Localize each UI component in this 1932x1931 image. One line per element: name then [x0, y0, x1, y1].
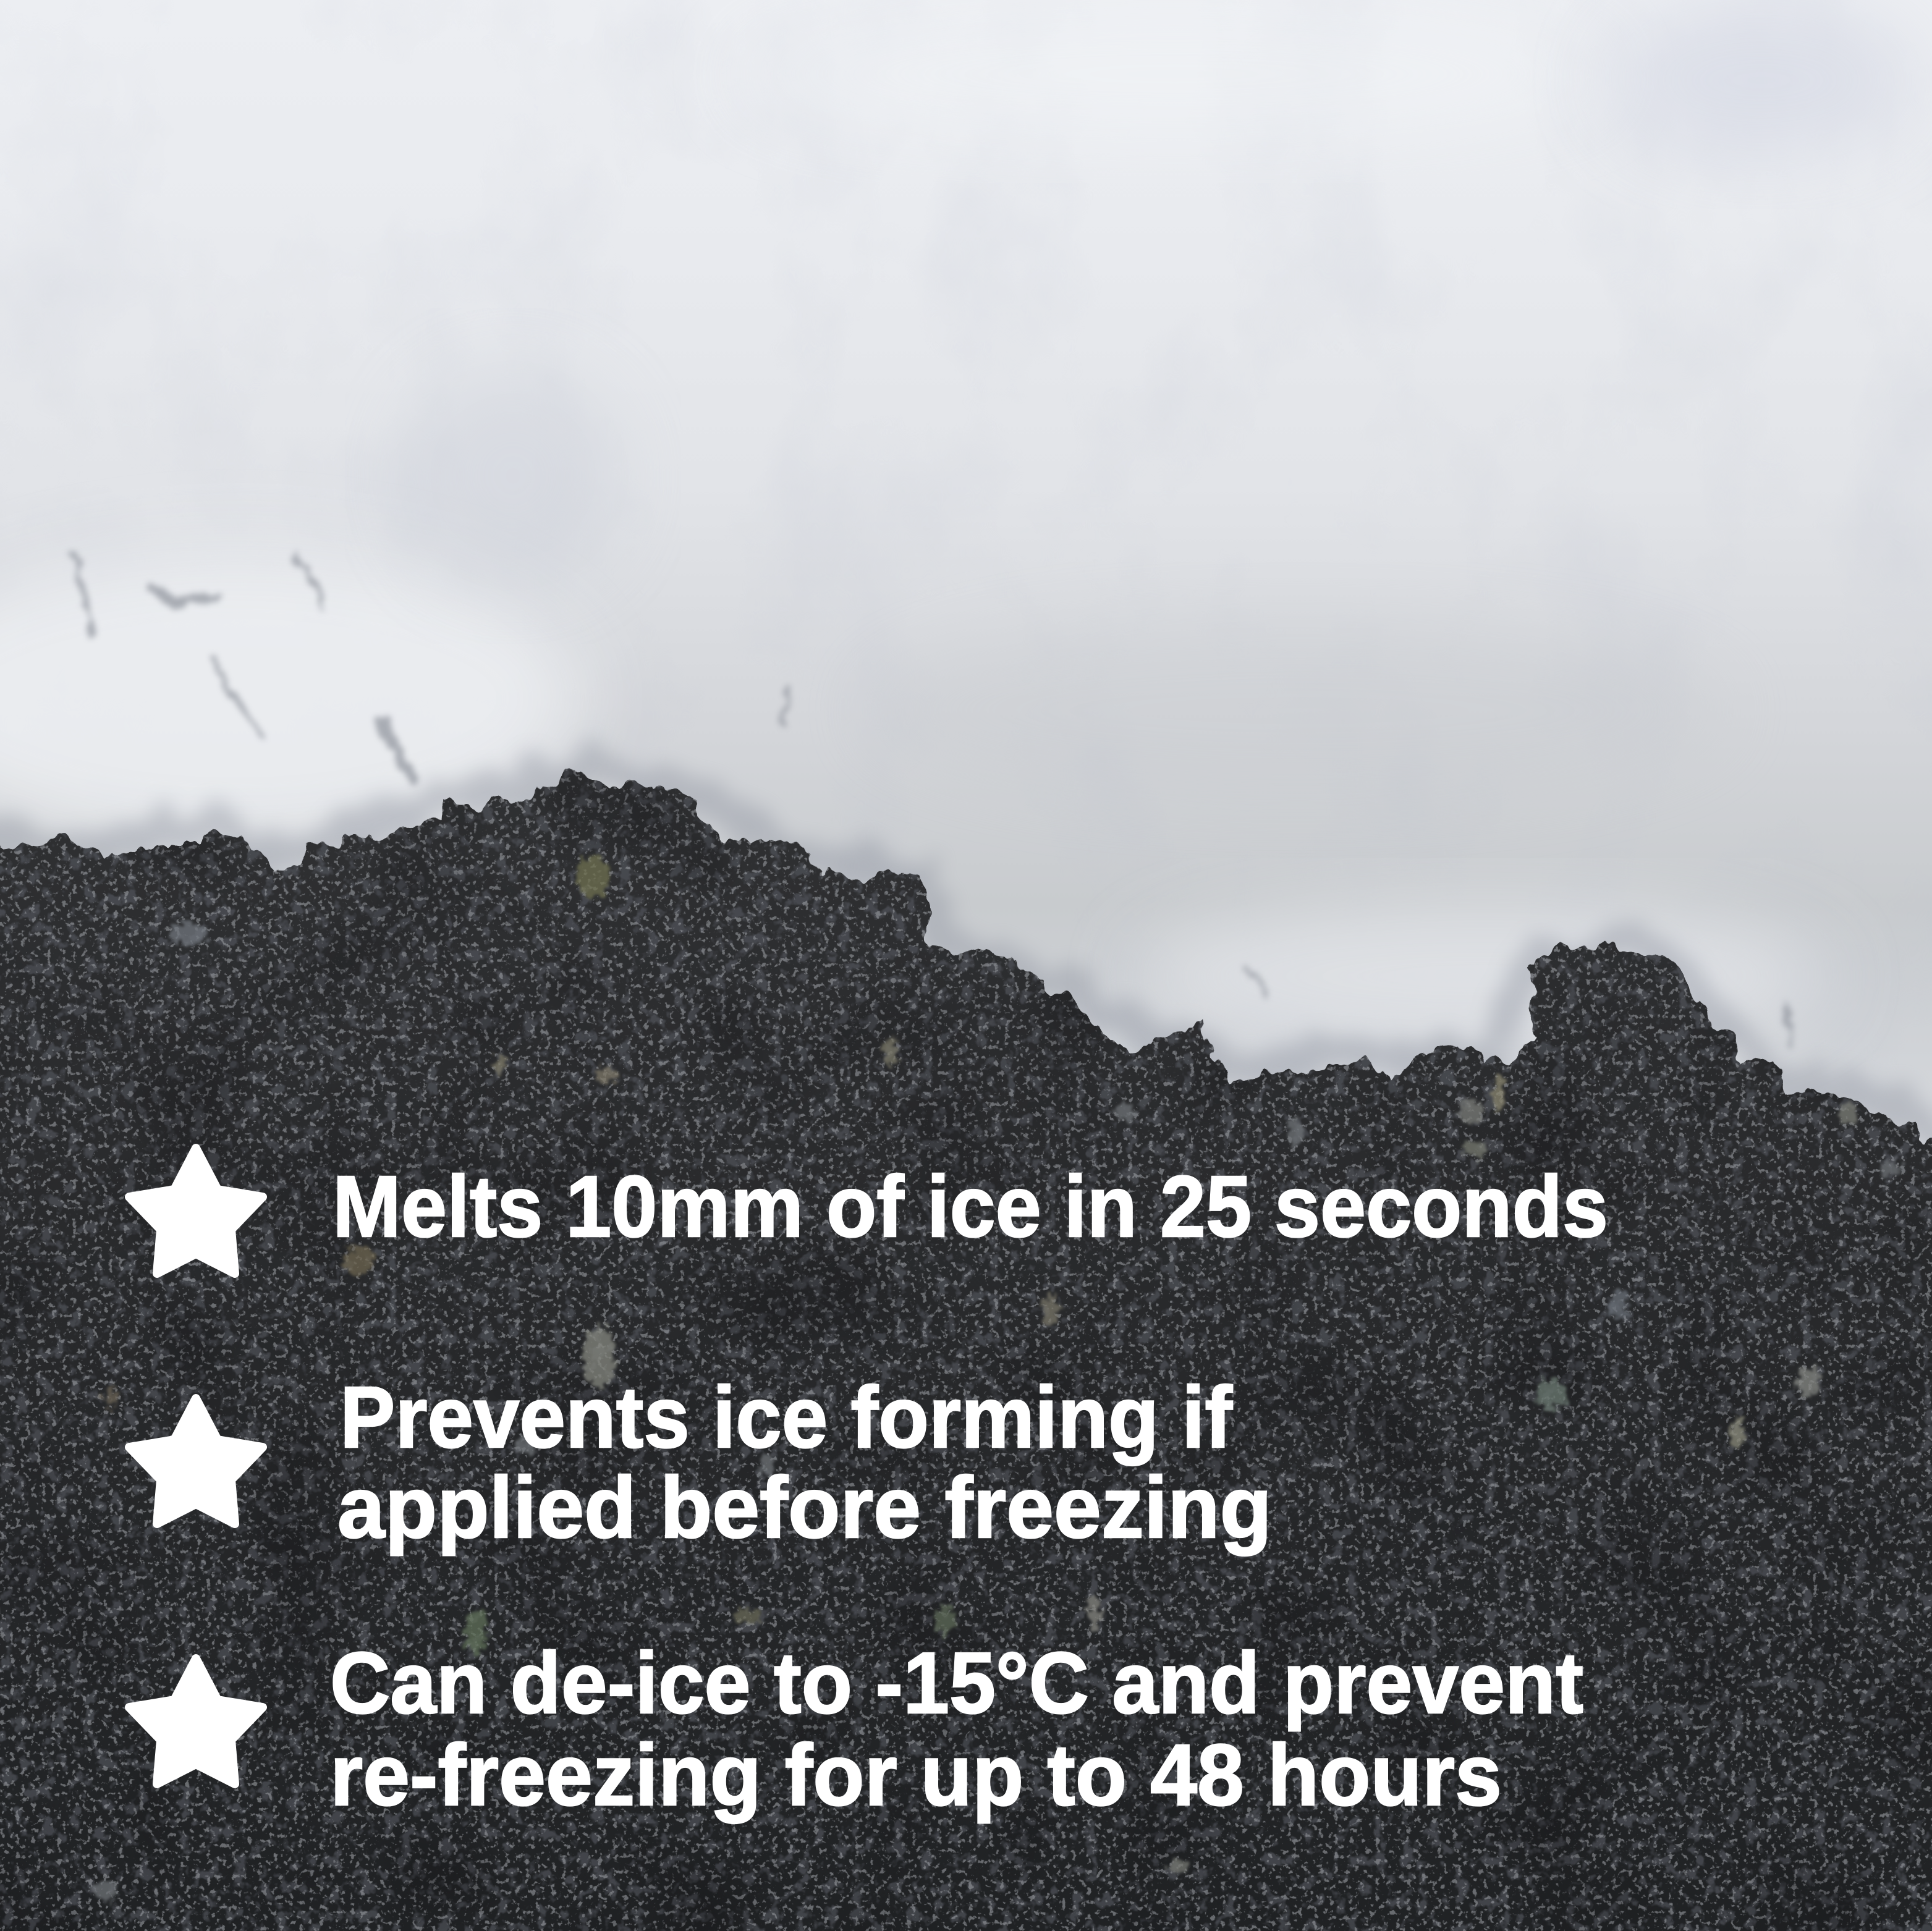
- feature: prevents ice: [129, 1368, 1272, 1556]
- icon: star 3: [129, 1658, 263, 1784]
- snow background: [0, 0, 1932, 1205]
- text: de-ice temperature: Can de-ice to -15°C and prevent: [330, 1634, 1583, 1731]
- ice edge shadows and cracks: [0, 552, 1932, 1137]
- asphalt road: [0, 711, 1932, 1931]
- icon: star 1: [129, 1148, 263, 1274]
- icon: star 2: [129, 1398, 263, 1524]
- feature: de-ice temperature: [129, 1634, 1583, 1823]
- text: prevents ice: Prevents ice forming if: [340, 1368, 1233, 1466]
- text: prevents ice: applied before freezing: [337, 1458, 1272, 1556]
- text: melts ice: Melts 10mm of ice in 25 seconds: [333, 1157, 1608, 1255]
- text: de-ice temperature: [330, 1634, 1583, 1823]
- text: de-ice temperature: re-freezing for up to 48 hours: [330, 1726, 1502, 1823]
- feature: melts ice: [129, 1148, 1608, 1274]
- text: prevents ice: [337, 1368, 1272, 1556]
- road stones: [93, 855, 1902, 1901]
